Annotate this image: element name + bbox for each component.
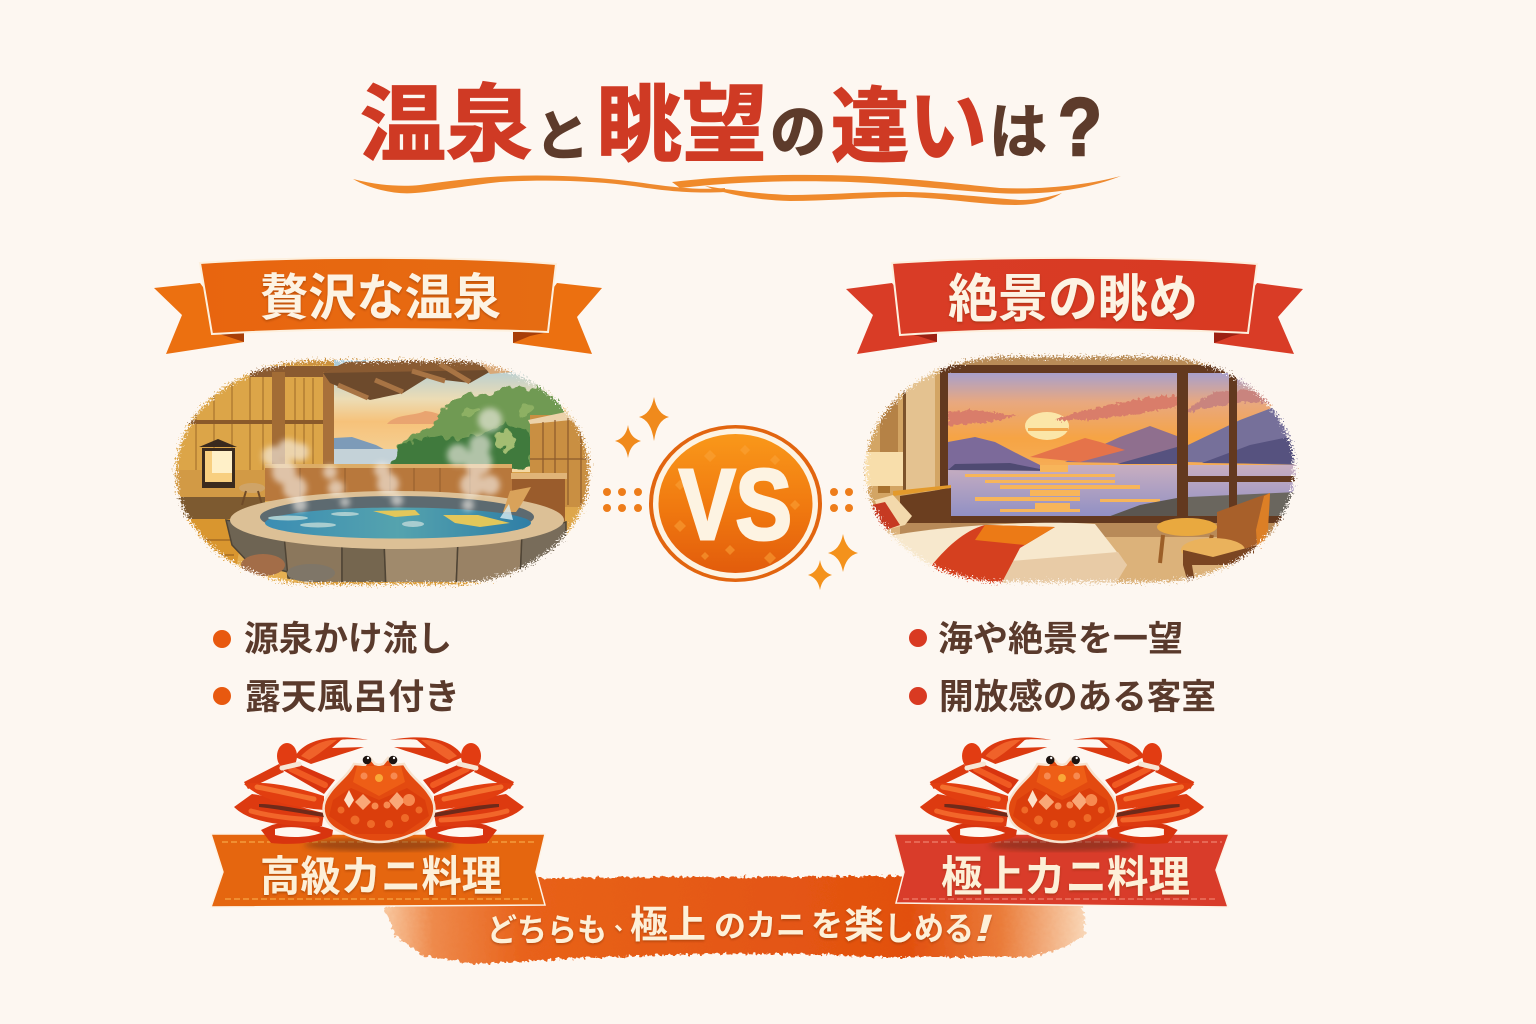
illustration: open-air bath [160, 350, 605, 595]
panel: luxury hot spring [154, 258, 605, 717]
pillow [875, 495, 912, 530]
sparkles top-left of VS [615, 397, 669, 458]
lantern [199, 439, 237, 488]
banner message: 、 [614, 910, 636, 935]
ribbon: red heading banner [846, 258, 1303, 354]
lamp [865, 452, 903, 493]
bullet list: hot spring: 源泉かけ流し [244, 620, 452, 659]
banner message: の [714, 909, 746, 944]
banner message: 極上 [630, 905, 706, 947]
icon: red crab right [920, 737, 1204, 851]
heading text: 贅沢な温泉 [260, 270, 501, 326]
title: 眺望 [597, 78, 767, 172]
pool stones [226, 520, 566, 590]
title underline brush stroke [353, 175, 1121, 205]
VS badge [649, 425, 822, 582]
VS badge: VS [679, 449, 792, 561]
left floor [174, 480, 265, 497]
chair [1181, 493, 1270, 583]
wall and curtains [863, 366, 940, 509]
bullet list: view: 開放感のある客室 [939, 678, 1216, 717]
table [1160, 535, 1212, 563]
steam [262, 408, 502, 512]
bullet list: hot spring [213, 620, 460, 717]
banner message [487, 905, 993, 950]
label ribbon: high-grade crab [211, 834, 545, 907]
title: と [535, 107, 589, 167]
title: ? [1058, 82, 1102, 173]
left wooden wall [178, 365, 334, 444]
title: 温泉 [360, 78, 532, 172]
label ribbon: high-grade crab: 高級カニ料理 [260, 853, 502, 900]
title [360, 78, 1102, 173]
label ribbon: finest crab: 極上カニ料理 [941, 854, 1190, 902]
title: の [770, 100, 826, 165]
label ribbon: finest crab [894, 834, 1229, 907]
sparkles bottom-right of VS [808, 534, 858, 590]
banner message: 楽 [844, 905, 884, 947]
banner message: しめる [884, 910, 974, 947]
window frame [940, 365, 1298, 524]
connector dots left [603, 488, 642, 512]
banner message: カニ [746, 908, 806, 943]
ribbon: orange heading banner [154, 258, 602, 354]
bullet list: view [909, 620, 1216, 717]
banner message: ! [975, 908, 993, 950]
heading text: 絶景の眺め [948, 271, 1198, 329]
bottom brush banner [384, 876, 1085, 964]
bullet list: hot spring: 露天風呂付き [245, 678, 460, 717]
bed [890, 522, 1127, 566]
banner message: どちらも [487, 912, 607, 948]
title: 違い [831, 82, 987, 173]
title: は [989, 99, 1047, 166]
roof [323, 358, 493, 400]
bullet list: view: 海や絶景を一望 [938, 620, 1183, 659]
icon: red crab left [234, 737, 524, 851]
banner message: を [811, 906, 843, 943]
panel: scenic view [846, 258, 1310, 717]
right fence [530, 415, 595, 507]
illustration: room with sea view [863, 352, 1298, 587]
connector dots right [830, 488, 853, 512]
desk [893, 485, 951, 496]
